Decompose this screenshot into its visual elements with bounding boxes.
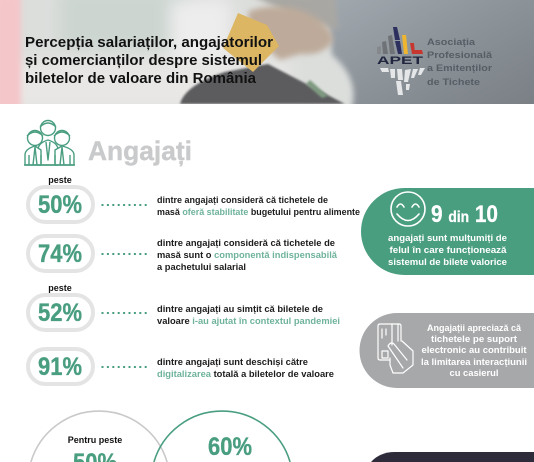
icon: employees group (24, 120, 75, 165)
logo: APET: APET (377, 55, 423, 67)
logo association name: a Emitenților (427, 63, 492, 74)
panel: card payment note: la limitarea interacțiunii (421, 356, 527, 367)
panel: card payment note: Angajații apreciază că (427, 322, 522, 333)
panel: 9 din 10 (361, 188, 534, 275)
stat row: 91%: dintre angajați sunt deschiși către (157, 356, 308, 367)
stat row: 50%: peste (48, 175, 72, 185)
stat row: 52%: dintre angajați au simțit că biletele de (157, 303, 323, 314)
stat row: 91% (28, 349, 334, 384)
panel: 9 din 10: 9 din 10 (431, 201, 498, 228)
heading: Angajați: Angajați (88, 136, 192, 166)
panel: card payment note: electronic au contribuit (422, 344, 526, 355)
panel: card payment note (360, 313, 534, 388)
header title: Percepția salariaților, angajatorilor (25, 34, 273, 51)
stat row: 52%: peste (48, 283, 72, 293)
logo association name: Asociația (427, 37, 476, 48)
stat row: 50%: dintre angajați consideră că tichetele de (157, 194, 328, 205)
panel: 9 din 10: angajați sunt mulțumiți de (388, 232, 507, 243)
stat row: 52% (28, 283, 340, 330)
stat row: 52%: 52% (38, 299, 82, 327)
stat row: 74% (28, 236, 338, 272)
header title: și comercianților despre sistemul (25, 52, 262, 69)
circle: green (154, 411, 290, 462)
header title: biletelor de valoare din România (25, 70, 257, 87)
logo: APET (377, 27, 425, 95)
stat row: 91%: 91% (38, 353, 82, 381)
panel: card payment note: cu casierul (450, 367, 498, 378)
stat row: 74%: 74% (38, 240, 82, 268)
stat row: 50%: masă oferă stabilitate bugetului pentru alimente (157, 206, 360, 217)
stat row: 74%: a pachetului salarial (157, 261, 246, 272)
logo association name (427, 37, 493, 88)
stat row: 50% (28, 175, 360, 222)
panel: card payment note: tichetele pe suport (431, 333, 517, 344)
circle: gray (31, 411, 167, 462)
panel: 9 din 10: felul în care funcționează (390, 244, 507, 255)
header title (25, 34, 273, 87)
logo association name: Profesională (427, 50, 493, 61)
stat row: 50%: 50% (38, 191, 82, 219)
stat row: 74%: masă sunt o componentă indispensabilă (157, 249, 338, 260)
logo association name: de Tichete (427, 77, 480, 88)
stat row: 74%: dintre angajați consideră că tichetele de (157, 237, 335, 248)
circle: green: 60% (208, 433, 252, 461)
stat row: 91%: digitalizarea totală a biletelor de valoare (157, 368, 334, 379)
header banner photo (0, 0, 534, 114)
panel: 9 din 10: sistemul de bilete valorice (388, 256, 507, 267)
circle: gray: Pentru peste (68, 435, 122, 445)
icon: hand holding card (378, 324, 413, 373)
icon: smiley (391, 192, 425, 226)
panel: dark bottom (371, 452, 534, 462)
stat row: 52%: valoare i-au ajutat în contextul pandemiei (157, 315, 340, 326)
